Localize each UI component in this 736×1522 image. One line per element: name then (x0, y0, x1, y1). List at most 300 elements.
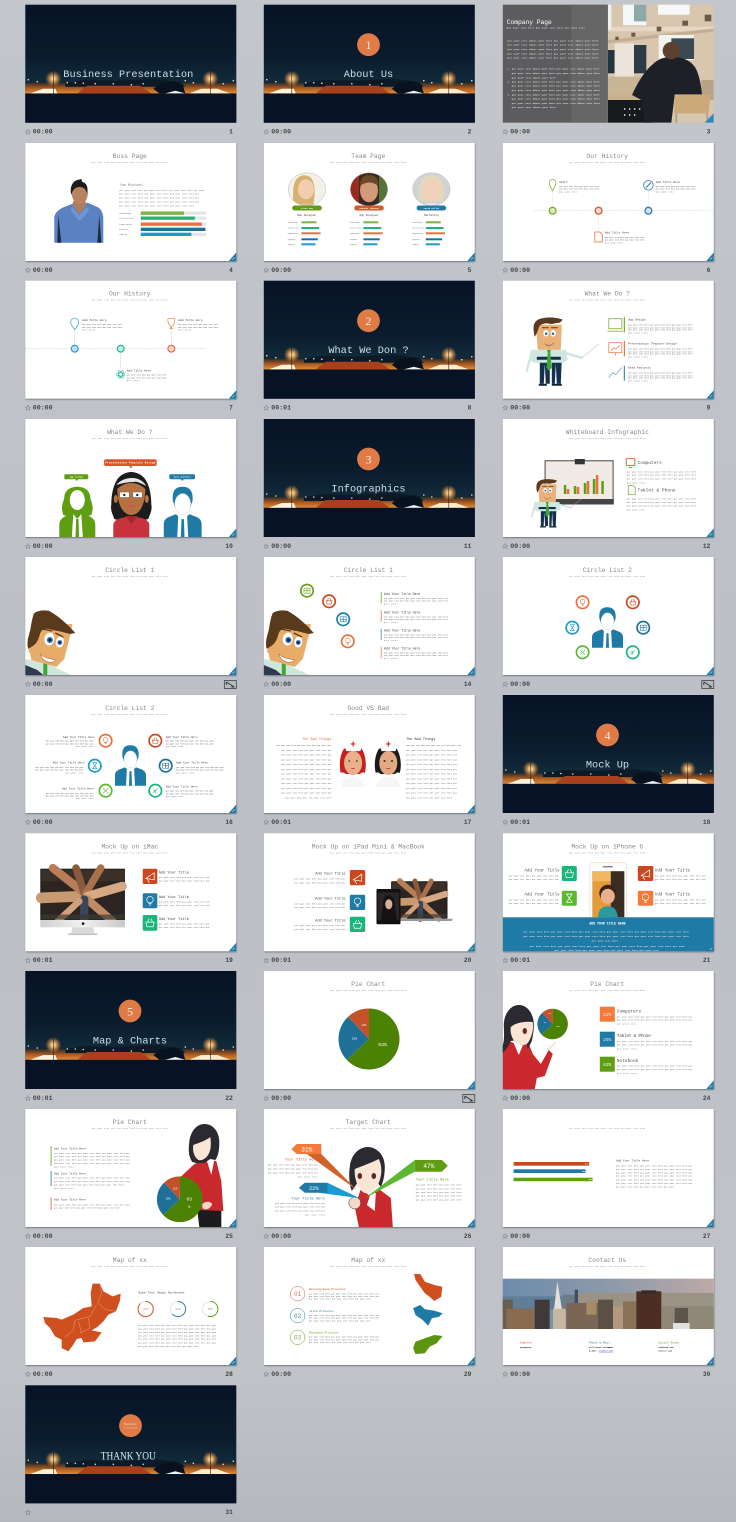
list item 2: Add Your Title Here (384, 610, 420, 614)
left column text: put your text here put your text here put (281, 758, 332, 761)
skill bars: Coding (350, 244, 356, 246)
list item 1: put your text here put your text here put your text here put (54, 1162, 131, 1165)
corner fold (706, 666, 714, 675)
skill bars: Illustrator (350, 228, 362, 230)
stat tile: 12%: 12% (603, 1012, 612, 1018)
slide 27: horizontal bars (503, 1109, 714, 1240)
banner text: put your text here put your text here put your text here put your text here put your text here put your text here (523, 935, 689, 938)
slide footer: 00:01 (33, 1095, 53, 1102)
stat tile: 63%: 63% (603, 1062, 612, 1068)
slide 7: Our History (25, 281, 237, 412)
slide footer: 00:00 (510, 1371, 530, 1378)
night city photo (264, 419, 475, 537)
map: Jilin (413, 1305, 443, 1326)
slide footer: 00:00 (33, 1371, 53, 1378)
computers text: put your text here put your text here put your text here (627, 470, 697, 473)
icon: balloon (71, 318, 79, 330)
slide footer (264, 1094, 475, 1102)
history item: right (178, 318, 219, 332)
notebook text: put your text (617, 1072, 637, 1075)
orange callout text (268, 1158, 319, 1178)
left text item 2: put your text (66, 771, 84, 774)
number ring 02 (290, 1308, 305, 1323)
slide footer (264, 819, 472, 826)
skill bar chart: Photoshop (119, 212, 132, 215)
map: Shandong (413, 1335, 443, 1354)
list item 3: put your text here put your text here put your text here (54, 1207, 121, 1210)
slide footer (264, 1233, 472, 1240)
slide footer (25, 819, 233, 826)
feature text 2: put your text here put your text here put (159, 904, 210, 907)
service list: put your text here put your text here put your text here (628, 350, 693, 353)
panel body text: put your text about your here put your text about your here (512, 98, 600, 101)
slide footer: 2 (468, 129, 472, 136)
right text item 1: put your text here put your text here put your (166, 740, 214, 743)
slide 2: About Us section (264, 5, 475, 136)
slide footer: 29 (464, 1371, 472, 1378)
slide footer (503, 128, 711, 136)
left feature 1 (509, 868, 560, 881)
iPhone mockup (590, 863, 627, 919)
text block: put your text here put your text here put your text here put (616, 1175, 693, 1178)
right text item 1 (166, 735, 214, 748)
province text 1: put your text here put your text here put your text (309, 1298, 372, 1301)
list item 2: put your text here put your text here put your text here put (54, 1177, 131, 1180)
left feature 1: put your text here put your text here put (509, 878, 559, 881)
history item: below (127, 368, 167, 382)
left feature 1: put your text here put your text here put (509, 874, 559, 877)
slide 28: Map of xx with rings (25, 1247, 237, 1378)
percentage ring 64% (170, 1301, 186, 1317)
left feature 1: Add Your Title (524, 868, 560, 873)
orange callout text: put your text here put your text here put (268, 1164, 319, 1167)
slide footer: 00:00 (33, 267, 53, 274)
notebook text: put your text here put your text here put your text here put (617, 1064, 693, 1067)
number ring 03: 03 (294, 1334, 302, 1341)
slide footer (503, 1371, 711, 1378)
feature text 1: Add Your Title (315, 871, 345, 876)
history item: left: put your text here put your text here (82, 326, 123, 329)
province text 2: put your text here put your text here put your text here put (309, 1317, 380, 1320)
icon tile: basket (350, 917, 365, 932)
slide subtitle: put your text here put your text here put your text here (569, 299, 646, 302)
history item: below: put your text here put your text here (605, 236, 645, 239)
right column text (406, 744, 462, 799)
section number badge: 1 (365, 38, 371, 52)
pie chart (537, 1009, 568, 1039)
right column text: put your text here put your text here put (406, 782, 458, 785)
feature text 1: put your text here put your text here put (294, 881, 346, 884)
pie chart: 25% (166, 1198, 171, 1200)
slide 17: Good VS Bad (264, 695, 475, 826)
social media column (658, 1341, 679, 1352)
paragraph text: put your text here put your text here put your text here put your (138, 1324, 217, 1327)
slide footer: 00:00 (33, 819, 53, 826)
slide 5: Team Page (264, 143, 475, 274)
list item 1: put your text here put your text here put your text here put (54, 1159, 131, 1162)
blue callout text: put your text here put your text here put (275, 1206, 326, 1209)
province text 2 (309, 1309, 380, 1322)
cartoon face (25, 610, 75, 675)
slide footer: 12 (703, 543, 711, 550)
timeline (25, 329, 206, 369)
feature text 1 (159, 871, 210, 883)
slide subtitle: put your text here put your text here put your text here (330, 713, 407, 716)
icon: compass (644, 180, 653, 190)
icon: location pin (549, 180, 556, 190)
right feature 1: put your text here put your text here put (655, 878, 706, 881)
skill bars (288, 221, 321, 246)
cover title: Business Presentation (63, 69, 193, 81)
icon tile: megaphone (350, 870, 365, 885)
skill bars: Photoshop (412, 222, 422, 224)
service list: put your text here put your text here put your text here (628, 326, 693, 329)
province text 1: Heilongjiang Province (309, 1287, 346, 1291)
slide card (25, 833, 237, 952)
right column text: put your text here put your text here put (406, 754, 458, 756)
list item 2: put your text here put your text here put your text here (54, 1184, 125, 1187)
banner text: put your text here (592, 940, 618, 943)
text block: Add Your Title Here (616, 1159, 649, 1163)
section number badge: 5 (127, 1004, 133, 1018)
banner text: put your text here put your text here put your text here put your text here put your text here put your text here (523, 931, 689, 934)
green callout text: Your Title Here (416, 1178, 449, 1182)
horizontal bar chart (514, 1162, 593, 1181)
corner fold (229, 1356, 236, 1365)
skill bars (350, 221, 383, 246)
blue callout text: Your Title Here (291, 1196, 325, 1202)
corner fold (467, 1218, 475, 1227)
left column text: put your text here put your text here (285, 796, 332, 799)
left text item 1: put your text here put your text here put your (46, 740, 95, 743)
icon tile: bulb (350, 895, 365, 910)
panel body text: put your text about your here put your text about your here (512, 72, 600, 75)
province text 3: put your text here put your text here put your text here put (309, 1336, 380, 1339)
left text item 1: put your text here put your text here put your (46, 742, 95, 745)
name pill: Sarah Miller (424, 207, 440, 210)
green callout text: put your text here put your text here (416, 1187, 462, 1190)
left column text: put your text here put your text here put (281, 754, 332, 756)
pie chart: 25 (544, 1021, 547, 1024)
section number badge: 2 (365, 314, 371, 328)
list item 3: Add Your Title Here (384, 628, 420, 632)
orange callout text: put your text here put your text here put (268, 1171, 319, 1174)
list item 2 (51, 1171, 131, 1190)
icon: document (595, 232, 602, 242)
stat tile: 25%: 25% (603, 1037, 612, 1043)
slide footer (25, 1371, 233, 1378)
slide footer: 19 (225, 957, 233, 964)
list item 3: put your (384, 639, 399, 642)
cartoon businessman (532, 479, 583, 528)
corner fold (229, 252, 236, 261)
slide card (264, 143, 475, 262)
section number badge: 3 (365, 452, 371, 466)
slide footer: 00:00 (510, 129, 530, 136)
slide subtitle: put your text here put your text here put your text here (92, 1265, 169, 1268)
slide footer: 00:00 (271, 1095, 291, 1102)
corner fold (467, 804, 475, 813)
feature text 3: Add Your Title (159, 917, 189, 922)
slide footer (503, 1233, 711, 1240)
province text 1 (309, 1287, 380, 1301)
list item 4: Add Your Title Here (384, 646, 420, 650)
orange speech bubble (104, 459, 157, 468)
history item: below: put your (127, 379, 140, 382)
icon: laptop (607, 319, 623, 331)
blue man figure (164, 487, 202, 537)
paragraph text: put your text here put your text here put your text here put your (138, 1334, 217, 1337)
boss name: Tom Michael (119, 183, 143, 188)
slide footer (503, 543, 711, 550)
slide 21: Mock Up on iPhone 6 (503, 833, 714, 964)
team member 1 (288, 172, 326, 246)
name pill: Alice May (301, 207, 314, 210)
slide title: Pie Chart (113, 1119, 147, 1126)
slide footer (503, 404, 711, 412)
slide card (264, 695, 475, 814)
slide subtitle: put your text here put your text here put your text here (92, 299, 169, 302)
slide footer: 00:00 (510, 543, 530, 550)
role: App Designer (359, 213, 379, 217)
pie chart: 12% (548, 1013, 552, 1015)
icon tile: megaphone (143, 869, 157, 884)
left feature 2: Add Your Title (524, 893, 560, 898)
percentage ring 64%: 64% (175, 1308, 181, 1311)
right text item 3: put your text here put your text here put your (166, 792, 214, 795)
list item 1: put your text here put your text here put your text here put (54, 1155, 131, 1158)
icon tile: bulb (638, 891, 653, 906)
right column text: put your text here put your text here put (406, 772, 458, 776)
slide footer: 25 (225, 1233, 233, 1240)
computers text: put your text here put your text here put your text here (627, 478, 697, 481)
slide footer: 20 (464, 957, 472, 964)
skill bar chart: Coding (119, 233, 128, 236)
number ring 03 (290, 1330, 305, 1345)
blue arrow callout 22% (299, 1183, 360, 1198)
slide subtitle: put your text here put your text here put your text here (330, 851, 407, 854)
list item 1 (51, 1146, 131, 1169)
tablet and phone text: put your text here put your text here put your text here put (617, 1043, 693, 1046)
slide title: Contact Us (588, 1257, 626, 1264)
feature text 1: put your text here put your text here put (159, 880, 210, 883)
feature text 3: Add Your Title (315, 918, 345, 923)
computers text: Computers (617, 1009, 641, 1015)
slide title: Whiteboard Infographic (566, 429, 649, 436)
slide card (503, 557, 714, 676)
slide subtitle: put your text here put your text here put your text here (569, 989, 646, 992)
feature text 1: put your text here put your text here put (159, 876, 210, 879)
panel body text: put your text about your here put your text about your here (507, 48, 599, 51)
slide 24: Pie Chart with girl (503, 971, 714, 1102)
history item: right: Add Title Here (656, 180, 680, 184)
computers text: put your text here put your text here put your text here (627, 474, 697, 477)
section number badge (596, 724, 619, 746)
icon: computer (626, 458, 635, 468)
slide footer: 00:01 (510, 819, 530, 826)
paragraph text: put your text here put your text here put your text here put your (138, 1341, 217, 1344)
slide card (25, 143, 237, 262)
slide title: Map of xx (351, 1257, 386, 1264)
section number badge (357, 309, 380, 332)
slide footer (264, 267, 472, 274)
skill bars: Keynote (350, 239, 357, 241)
service list: put your text here put your text here put your text here (628, 372, 693, 375)
slide footer: 9 (707, 405, 711, 412)
slide subtitle: put your text here put your text here put your text here (330, 989, 407, 992)
history item: left: Add Title Here (82, 318, 107, 322)
slide title: Our History (587, 153, 628, 160)
slide footer (264, 404, 472, 412)
tablet text: put your text here put your text here put your text here (627, 498, 697, 501)
pie chart: 63% (556, 1025, 560, 1028)
skill bars: Keynote (288, 239, 295, 241)
city skyline photo (503, 1279, 714, 1329)
slide footer (25, 1509, 233, 1516)
corner fold (229, 1218, 236, 1227)
number ring 01: 01 (294, 1291, 302, 1298)
slide title: What We Do ? (107, 429, 153, 436)
boss biography: put your text here put your text here put your text here (119, 204, 195, 207)
notebook text: put your text here put your text here put your text here put (617, 1068, 693, 1071)
pie chart: 12% (173, 1188, 178, 1190)
slide 13: Circle List 1 intro (25, 557, 237, 688)
list item 4 (381, 646, 449, 660)
service list: Presentation Template Design (628, 342, 677, 346)
slide title: Circle List 2 (105, 705, 155, 712)
text heading: Some Text About Northeast (138, 1290, 185, 1294)
left column text: put your text here put your text here put (281, 749, 332, 752)
orange arrow callout 31%: 31% (301, 1146, 313, 1154)
slide footer: 5 (468, 267, 472, 274)
stat tile: 12% (600, 1007, 615, 1022)
skill bars: Photoshop (288, 222, 298, 224)
history item: below (605, 230, 645, 244)
slide subtitle: put your text here put your text here put your text here (569, 437, 646, 440)
left column text: put your text here put your text here put (281, 772, 332, 776)
province text 3: put your text here put your text here put your text here put (309, 1338, 380, 1341)
closing title: THANK YOU (101, 1450, 156, 1462)
feature text 1: put your text here put your text here put (294, 877, 346, 880)
feature text 1: Add Your Title (159, 871, 189, 876)
history item: right: Add Title Here (178, 318, 203, 322)
right column text: put your text here put your text here (406, 796, 453, 799)
green callout text: put your text here put your text here (416, 1184, 462, 1187)
slide title: Circle List 1 (344, 567, 393, 574)
slide footer (264, 681, 472, 688)
history item: right: put your text here put your text here (178, 326, 219, 329)
percentage ring 87%: 87% (143, 1308, 149, 1311)
slide footer: 00:00 (271, 267, 291, 274)
history item: left: put your (82, 329, 96, 332)
circle icon: red (323, 595, 335, 608)
slide card (503, 1247, 714, 1366)
slide 16: Circle List 2 (25, 695, 237, 826)
slide title: Good VS Bad (348, 705, 389, 712)
slide 26: Target Chart (264, 1109, 475, 1240)
left column text: put your text here put your text here put (281, 763, 332, 766)
icon: tablet document (628, 486, 635, 494)
slide title: Mock Up on iPad Mini & MacBook (312, 843, 425, 850)
slide footer: 00:00 (271, 1233, 291, 1240)
corner fold (706, 1080, 714, 1089)
right column text: put your text here put your text here put your text (406, 744, 462, 747)
text block: put your text here put your text here put your text here put (616, 1171, 693, 1174)
history item: below: Add Title Here (127, 368, 151, 372)
tablet text (627, 498, 697, 512)
slide 31: Thank You (25, 1385, 236, 1516)
list item 3 (381, 628, 449, 642)
right column heading: The Bad Things (406, 737, 436, 742)
slide subtitle: put your text here put your text here put your text here (569, 851, 646, 854)
history item: below: put your text here put your text here (127, 377, 167, 380)
computers text (617, 1009, 693, 1026)
left text item 2 (36, 760, 85, 774)
slide footer: 00:00 (33, 543, 53, 550)
skill bars: Powerpoint (412, 233, 423, 235)
slide subtitle: put your text here put your text here put your text here (92, 713, 169, 716)
slide subtitle: put your text here put your text here put your text here (330, 1127, 407, 1130)
panel body text: put your text about your here put your text about your here (507, 44, 599, 47)
panel body text: put your text about your here put your text about your here (507, 39, 599, 42)
paragraph text: put your text here put your text here put your text here put your (138, 1331, 217, 1334)
slide footer: 00:00 (271, 681, 291, 688)
percentage ring 55%: 55% (208, 1308, 213, 1311)
slide 6: Our History (503, 143, 714, 274)
skill bars: Coding (412, 244, 419, 246)
slide subtitle: put your text here put your text here put your text here (569, 575, 646, 578)
slide subtitle: put your text here put your text here put your text here (330, 575, 407, 578)
slide card (264, 1247, 475, 1366)
slide card (25, 1247, 237, 1366)
orange callout text: put your text (298, 1175, 319, 1178)
green speech bubble: App Design (70, 476, 84, 479)
role: Marketing (424, 213, 439, 217)
horizontal bar chart: 75% (582, 1171, 586, 1173)
section number badge: 4 (604, 728, 610, 742)
service list: App Design (628, 318, 646, 322)
slide footer: 28 (225, 1371, 233, 1378)
history item: start: put your text here put your text here (559, 185, 600, 188)
slide footer: 7 (229, 405, 233, 412)
slide footer: 00:01 (33, 957, 53, 964)
province text 3: Shandong Province (309, 1330, 339, 1334)
feature text 2 (159, 895, 210, 907)
right text item 3 (166, 785, 214, 798)
slide footer: 11 (464, 543, 472, 550)
slide title: Mock Up on iMac (101, 843, 158, 850)
corner fold (467, 943, 475, 951)
feature text 1 (294, 872, 346, 884)
slide footer: 00:01 (510, 957, 530, 964)
right text item 2: Add Your Title Here (176, 760, 208, 764)
list item 2: put your text here put your text here put your text here (384, 616, 449, 618)
corner fold (467, 1080, 475, 1089)
tablet and phone text (617, 1033, 693, 1050)
list item 1: Add Your Title Here (54, 1147, 86, 1151)
tablet and phone text: put your text (617, 1047, 637, 1050)
feature text 3 (159, 917, 210, 929)
right text item 2: put your text (176, 771, 195, 774)
history item: right: put your text here put your text here (656, 185, 696, 188)
feature text 2: put your text here put your text here put (294, 906, 346, 909)
left column text (276, 744, 332, 799)
icon tile: bulb (143, 893, 157, 908)
icon: chart board (609, 343, 622, 356)
slide footer (25, 404, 233, 412)
icon: atom (116, 370, 125, 379)
boss portrait (54, 179, 103, 243)
